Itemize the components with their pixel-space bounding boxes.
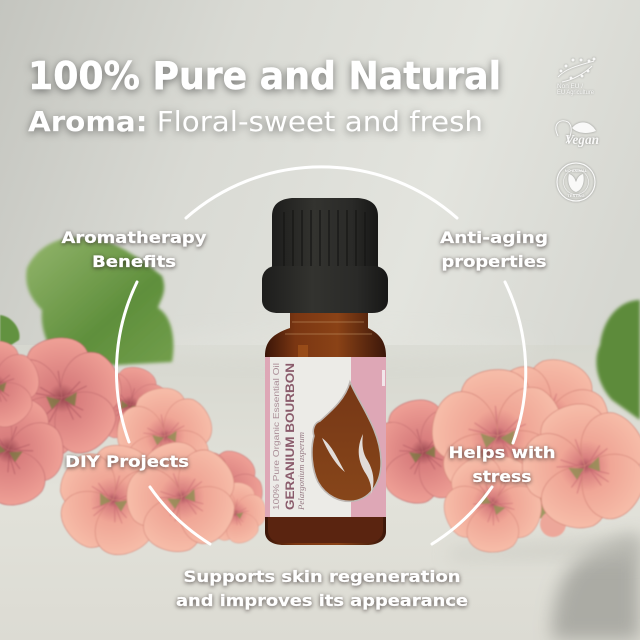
icon: EU organic leaf: Non EU / xyxy=(557,84,583,90)
subtitle: aroma: Aroma: Floral-sweet and fresh xyxy=(28,105,483,138)
icon: no animal testing: NO ANIMAL xyxy=(565,168,588,173)
bottle base and glass xyxy=(265,312,386,545)
label: anti-aging properties: properties xyxy=(442,252,546,271)
bottle xyxy=(262,198,388,545)
icon: small left leaf xyxy=(0,315,20,352)
icon: no animal testing xyxy=(557,163,595,201)
label: DIY projects: DIY Projects xyxy=(65,452,189,471)
icon: EU organic leaf xyxy=(557,58,596,96)
label: aromatherapy benefits xyxy=(62,228,207,271)
label: skin regeneration xyxy=(176,567,468,610)
circle of white arcs xyxy=(116,167,526,544)
icon: oil drop xyxy=(312,382,381,501)
label: helps with stress xyxy=(448,443,556,486)
label: helps with stress: Helps with xyxy=(448,443,556,462)
icon: vegan logo: Vegan xyxy=(565,133,599,148)
label: skin regeneration: and improves its appearance xyxy=(176,591,468,610)
icon: no animal testing: TESTING xyxy=(567,193,585,198)
label: aromatherapy benefits: Aromatherapy xyxy=(62,228,207,247)
label: helps with stress: stress xyxy=(472,467,532,486)
label text: product details xyxy=(271,363,306,511)
label: skin regeneration: Supports skin regeneration xyxy=(184,567,460,586)
label text: product details: GERANIUM BOURBON xyxy=(283,363,297,510)
icon: vegan logo xyxy=(556,121,599,148)
label: anti-aging properties: Anti-aging xyxy=(440,228,548,247)
flowers: right cluster xyxy=(354,339,640,580)
flowers: front left cluster xyxy=(38,380,281,576)
label text: product details: 100% Pure Organic Essential Oil xyxy=(271,363,281,510)
title: 100% Pure and Natural xyxy=(28,54,501,98)
label: anti-aging properties xyxy=(440,228,548,271)
bottle label xyxy=(265,357,386,517)
icon: left green geranium leaf xyxy=(26,238,173,368)
flowers: far left cluster xyxy=(0,329,181,530)
bottle bottom glass highlight xyxy=(268,517,383,543)
label: aromatherapy benefits: Benefits xyxy=(92,252,176,271)
icon: right green leaf xyxy=(596,300,640,420)
label text: product details: Pelargonium asperum xyxy=(297,432,306,511)
icon: EU organic leaf: EU Agriculture xyxy=(557,90,595,96)
bottle cap xyxy=(262,198,388,313)
